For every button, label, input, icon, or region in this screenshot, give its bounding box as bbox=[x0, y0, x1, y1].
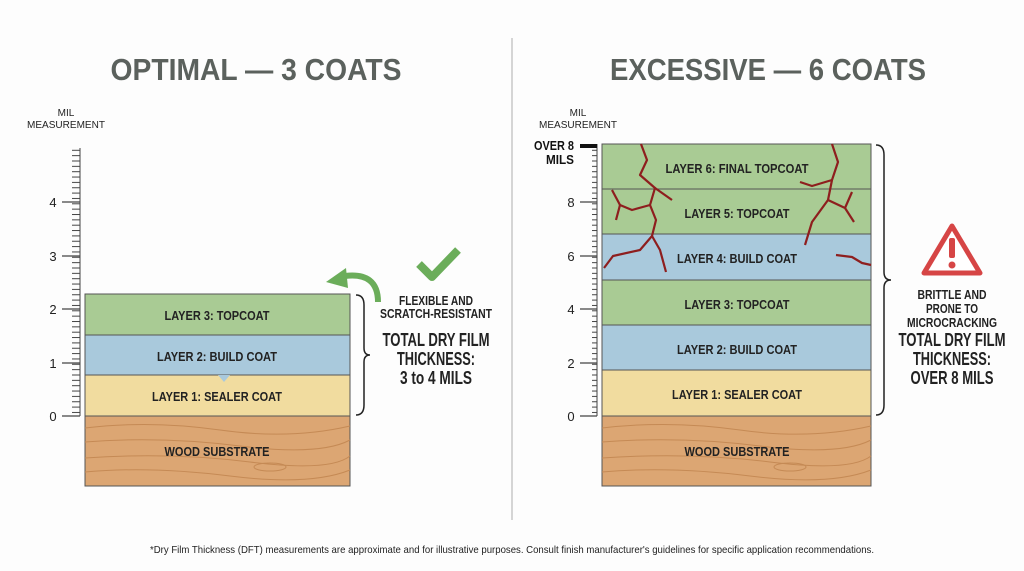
right callout text: BRITTLE AND bbox=[918, 287, 986, 302]
left ruler: 0 bbox=[49, 409, 57, 424]
left brace bbox=[356, 295, 370, 415]
right ruler: 0 bbox=[567, 409, 575, 424]
left ruler: MIL bbox=[58, 108, 75, 119]
right callout text: MICROCRACKING bbox=[907, 315, 997, 330]
right ruler: OVER 8 bbox=[534, 138, 574, 153]
left ruler bbox=[27, 108, 105, 424]
icon: check bbox=[419, 250, 458, 277]
right callout text: PRONE TO bbox=[926, 301, 978, 316]
text: LAYER 3: TOPCOAT bbox=[164, 308, 270, 323]
icon: warning bbox=[924, 226, 980, 273]
right stack bbox=[602, 144, 871, 486]
cracks bbox=[604, 144, 871, 272]
right callout text bbox=[898, 287, 1006, 388]
right ruler: MEASUREMENT bbox=[539, 120, 617, 131]
left callout text: THICKNESS: bbox=[397, 349, 475, 369]
right ruler: 4 bbox=[567, 302, 575, 317]
text: LAYER 4: BUILD COAT bbox=[677, 251, 797, 266]
text: WOOD SUBSTRATE bbox=[164, 444, 270, 459]
left callout text: TOTAL DRY FILM bbox=[382, 330, 490, 350]
left callout text: 3 to 4 MILS bbox=[400, 368, 472, 388]
title: excessive: EXCESSIVE — 6 COATS bbox=[610, 52, 926, 87]
text: LAYER 6: FINAL TOPCOAT bbox=[666, 161, 809, 176]
left callout text: FLEXIBLE AND bbox=[399, 293, 473, 308]
footnote: *Dry Film Thickness (DFT) measurements are approximate and for illustrative purposes. Consult finish manufacturer's guidelines for specific application recommendations. bbox=[150, 544, 874, 556]
title: optimal: OPTIMAL — 3 COATS bbox=[110, 52, 402, 87]
text: LAYER 2: BUILD COAT bbox=[157, 349, 277, 364]
left ruler: 2 bbox=[49, 302, 57, 317]
right ruler: MILS bbox=[546, 152, 574, 167]
left ruler: MEASUREMENT bbox=[27, 120, 105, 131]
right ruler: 2 bbox=[567, 356, 575, 371]
text: LAYER 5: TOPCOAT bbox=[684, 206, 790, 221]
text: LAYER 3: TOPCOAT bbox=[684, 297, 790, 312]
text: LAYER 2: BUILD COAT bbox=[677, 342, 797, 357]
right callout text: THICKNESS: bbox=[913, 349, 991, 369]
right ruler: 8 bbox=[567, 195, 575, 210]
icon: curved arrow bbox=[326, 268, 378, 302]
left callout text: SCRATCH-RESISTANT bbox=[380, 306, 492, 321]
left ruler: 4 bbox=[49, 195, 57, 210]
right callout text: OVER 8 MILS bbox=[910, 368, 994, 388]
right ruler bbox=[534, 108, 617, 424]
left callout text bbox=[380, 293, 492, 388]
right ruler: MIL bbox=[570, 108, 587, 119]
left ruler: 1 bbox=[49, 356, 57, 371]
left ruler: 3 bbox=[49, 249, 57, 264]
left stack bbox=[85, 294, 350, 486]
right brace bbox=[876, 145, 891, 415]
text: LAYER 1: SEALER COAT bbox=[152, 389, 282, 404]
text: LAYER 1: SEALER COAT bbox=[672, 387, 802, 402]
text: WOOD SUBSTRATE bbox=[684, 444, 790, 459]
right ruler: 6 bbox=[567, 249, 575, 264]
